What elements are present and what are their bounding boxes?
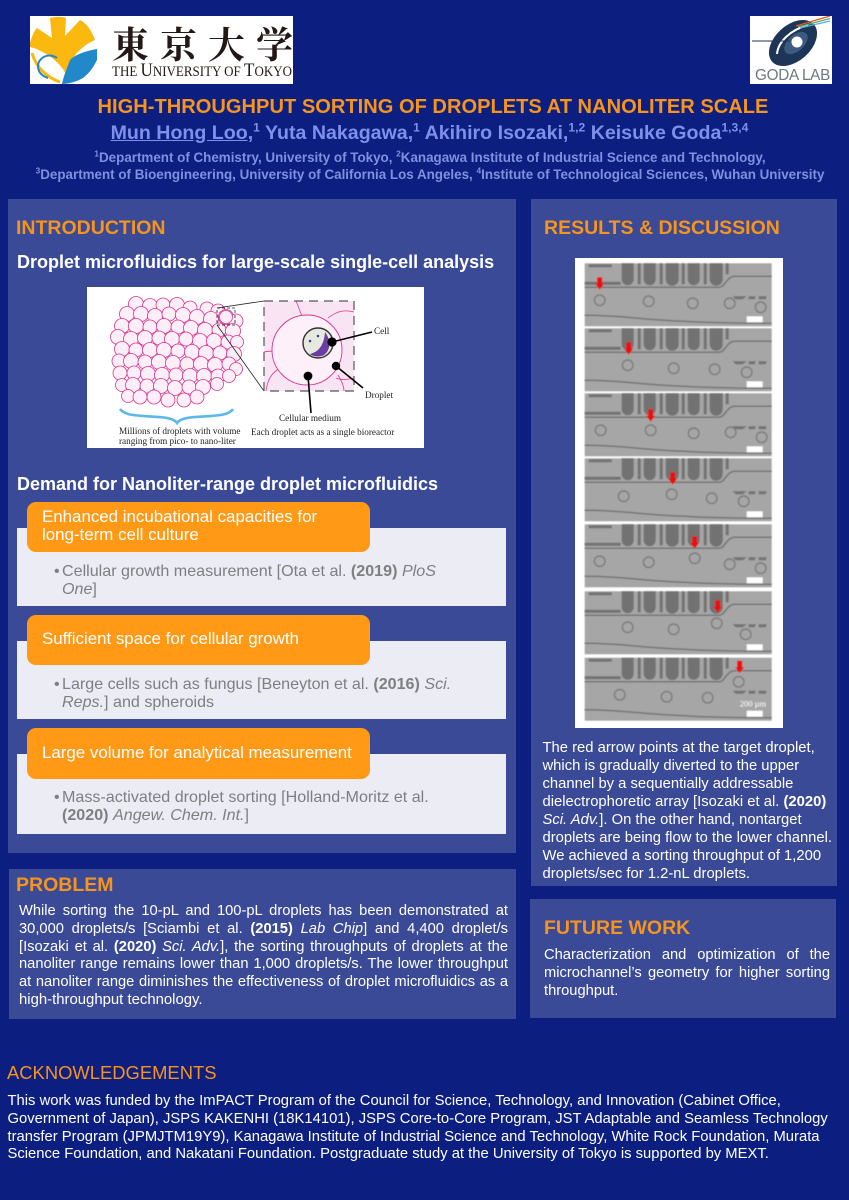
panel: problem	[9, 869, 516, 1019]
heading: future work: FUTURE WORK	[544, 917, 690, 939]
acknowledgements text	[8, 1093, 828, 1162]
problem text: at nanoliter range diminishes the effectiveness of droplet microfluidics as a	[19, 974, 508, 990]
affiliations: 3Department of Bioengineering, University of California Los Angeles, 4Institute of Technological Sciences, Wuhan University	[36, 166, 824, 182]
panel: introduction	[8, 199, 516, 853]
card text 2	[54, 675, 451, 710]
card: incubational capacities: One]	[62, 580, 97, 598]
card header 2	[27, 615, 370, 665]
card text 3	[54, 788, 429, 824]
card header 1: Enhanced incubational capacities for	[42, 507, 317, 526]
panel: results and discussion	[531, 199, 837, 886]
results text: We achieved a sorting throughput of 1,200	[542, 848, 821, 864]
image sequence: droplet sorting frames	[575, 258, 783, 728]
future work text: throughput.	[544, 983, 618, 999]
results text: The red arrow points at the target droplet,	[542, 740, 815, 756]
problem text: While sorting the 10-pL and 100-pL droplets has been demonstrated at	[19, 903, 508, 919]
droplet cluster	[110, 296, 244, 407]
heading: results and discussion: RESULTS & DISCUSSION	[544, 217, 780, 239]
logo: University of Tokyo: THE UNIVERSITY OF TOKYO	[112, 60, 292, 81]
logo: University of Tokyo	[30, 16, 293, 84]
panel: future work	[530, 899, 836, 1018]
diagram labels: Millions of droplets with volume	[119, 426, 240, 436]
results text: dielectrophoretic array [Isozaki et al. (2020)	[542, 794, 826, 810]
card text 2: •	[54, 675, 60, 693]
heading: problem: PROBLEM	[16, 874, 114, 896]
diagram labels: Each droplet acts as a single bioreactor	[251, 427, 394, 437]
diagram labels	[119, 326, 394, 446]
frame 5	[585, 524, 772, 587]
callout lines	[304, 332, 372, 413]
heading: acknowledgements: ACKNOWLEDGEMENTS	[7, 1062, 216, 1083]
blue brace	[120, 409, 233, 423]
card: incubational capacities: Cellular growth measurement [Ota et al. (2019) PloS	[62, 562, 436, 580]
problem text: high-throughput technology.	[19, 992, 203, 1008]
card: analytical volume	[17, 728, 506, 834]
results text: Sci. Adv.]. On the other hand, nontarget	[542, 812, 802, 828]
affiliations	[36, 149, 824, 182]
results text: droplets are being flow to the lower channel.	[542, 830, 832, 846]
frame 2	[585, 328, 772, 391]
acknowledgements text: transfer Program (JPMJTM19Y9), Kanagawa Institute of Industrial Science and Technology, White Rock Foundation, Murata	[8, 1128, 820, 1144]
card: space for growth: Reps.] and spheroids	[62, 692, 214, 710]
card: incubational capacities	[17, 502, 506, 606]
frame 6	[585, 591, 772, 654]
enlarged droplet inset	[264, 301, 354, 391]
logo: Goda Lab	[750, 16, 832, 84]
frame 3	[585, 393, 772, 456]
card header 2: Sufficient space for cellular growth	[42, 629, 299, 648]
affiliations: 1Department of Chemistry, University of Tokyo, 2Kanagawa Institute of Industrial Science and Technology,	[94, 149, 766, 165]
zoom box on cluster	[217, 301, 264, 391]
acknowledgements text: Government of Japan), JSPS KAKENHI (18K14101), JSPS Core-to-Core Program, JST Adaptable and Seamless Technology	[8, 1111, 828, 1127]
results text	[542, 740, 832, 882]
logo: Goda Lab: GODA LAB	[755, 67, 830, 84]
subheading: demand: Demand for Nanoliter-range droplet microfluidics	[17, 474, 438, 494]
frame 4	[585, 458, 772, 521]
title: HIGH-THROUGHPUT SORTING OF DROPLETS AT NANOLITER SCALE	[98, 96, 768, 118]
frame 7	[585, 658, 772, 721]
frame 1	[585, 263, 772, 326]
results text: which is gradually diverted to the upper	[542, 758, 799, 774]
diagram labels: Droplet	[365, 390, 394, 400]
diagram labels: Cell	[374, 326, 390, 336]
card: space for growth	[17, 615, 506, 719]
problem text: nanoliter range remains lower than 1,000 droplets/s. The lower throughput	[19, 956, 508, 972]
card header 3	[27, 728, 370, 779]
card: space for growth: Large cells such as fungus [Beneyton et al. (2016) Sci.	[62, 675, 451, 693]
card header 3: Large volume for analytical measurement	[42, 743, 352, 762]
diagram labels: Cellular medium	[279, 413, 341, 423]
diagram labels: ranging from pico- to nano-liter	[119, 436, 236, 446]
results text: channel by a sequentially addressable	[542, 776, 793, 792]
results text: droplets/sec for 1.2-nL droplets.	[542, 866, 750, 882]
card: analytical volume: (2020) Angew. Chem. Int.]	[62, 806, 249, 824]
card text 1: •	[54, 562, 60, 580]
future work text: Characterization and optimization of the	[544, 947, 830, 963]
card body 3	[16, 754, 506, 834]
subheading: droplet microfluidics: Droplet microfluidics for large-scale single-cell analysis	[17, 252, 494, 272]
problem text: 30,000 droplets/s [Sciambi et al. (2015) Lab Chip] and 4,400 droplet/s	[19, 921, 508, 937]
authors: Mun Hong Loo,1 Yuta Nakagawa,1 Akihiro Isozaki,1,2 Keisuke Goda1,3,4	[111, 120, 748, 144]
diagram: droplet schematic	[87, 287, 424, 448]
acknowledgements text: This work was funded by the ImPACT Program of the Council for Science, Technology, and Innovation (Cabinet Office,	[8, 1093, 781, 1109]
frame 7: 200 µm	[740, 699, 766, 709]
acknowledgements text: Science Foundation, and Nakatani Foundation. Postgraduate study at the University of Tokyo is supported by MEXT.	[8, 1146, 769, 1162]
card header 1: long-term cell culture	[42, 525, 199, 544]
heading: introduction: INTRODUCTION	[16, 217, 166, 239]
problem text: [Isozaki et al. (2020) Sci. Adv.], the sorting throughputs of droplets at the	[19, 939, 508, 955]
card body 1	[16, 528, 506, 606]
future work text: microchannel’s geometry for higher sorting	[544, 965, 830, 981]
future work text	[544, 947, 830, 999]
card body 2	[16, 641, 506, 719]
problem text	[19, 903, 508, 1008]
card text 3: •	[54, 788, 60, 806]
card text 1	[54, 562, 436, 598]
card: analytical volume: Mass-activated droplet sorting [Holland-Moritz et al.	[62, 788, 429, 806]
card header 1	[27, 502, 370, 552]
